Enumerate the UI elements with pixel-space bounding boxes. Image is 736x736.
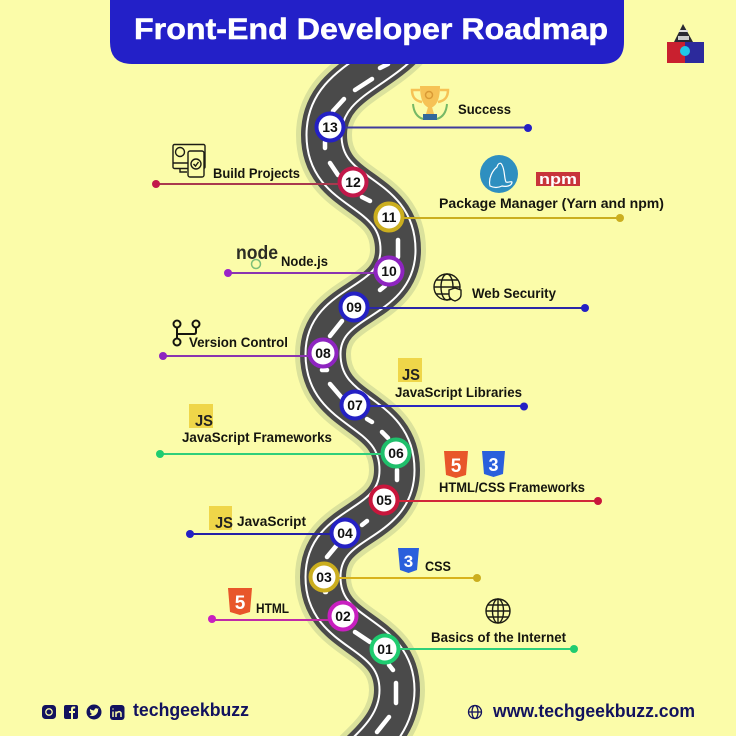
marker 12 bbox=[340, 168, 366, 196]
icon: html5: 5 bbox=[451, 456, 462, 477]
marker 03: 03 bbox=[316, 569, 332, 585]
step 10: node.js: Node.js bbox=[281, 254, 328, 269]
social icons bbox=[42, 704, 124, 720]
marker 09 bbox=[340, 294, 368, 320]
icon: trophy bbox=[412, 86, 448, 120]
icon: git branch bbox=[174, 320, 200, 346]
step 01: basics of the internet bbox=[398, 599, 578, 653]
marker 12: 12 bbox=[345, 174, 361, 190]
numbered road markers bbox=[310, 114, 410, 662]
marker 13: 13 bbox=[322, 119, 338, 135]
icon: devices bbox=[173, 144, 205, 177]
step 06: javascript frameworks: JavaScript Frameworks bbox=[182, 430, 332, 445]
icon: footer globe bbox=[468, 706, 482, 718]
marker 04 bbox=[332, 520, 358, 546]
step 02: html: HTML bbox=[256, 601, 289, 616]
icon: js bbox=[398, 358, 422, 384]
icon: css3: 3 bbox=[404, 552, 413, 571]
step 12: build projects bbox=[152, 144, 340, 188]
step 05: html/css frameworks bbox=[398, 451, 602, 505]
icon: html5: 5 bbox=[235, 593, 246, 614]
step 07: javascript libraries bbox=[370, 358, 528, 410]
step 04: javascript bbox=[186, 506, 332, 538]
step 03: css bbox=[338, 548, 481, 582]
winding road bbox=[322, 42, 405, 736]
step 10: node.js bbox=[224, 243, 375, 277]
icon: js bbox=[189, 404, 213, 430]
icon: globe with shield bbox=[434, 274, 461, 301]
step 13: success bbox=[345, 86, 532, 132]
icon: css3 bbox=[482, 451, 505, 477]
marker 08 bbox=[310, 340, 336, 366]
marker 06: 06 bbox=[388, 445, 404, 461]
step 11: package manager bbox=[404, 155, 664, 222]
icon: hacker laptop logo bbox=[667, 24, 704, 63]
icon: js bbox=[209, 506, 233, 532]
marker 09: 09 bbox=[346, 299, 362, 315]
step 02: html bbox=[208, 588, 330, 623]
marker 05 bbox=[370, 486, 398, 514]
marker 08: 08 bbox=[315, 345, 331, 361]
step 11: package manager: Package Manager (Yarn and npm) bbox=[439, 196, 664, 211]
footer brand name: techgeekbuzz bbox=[133, 699, 249, 720]
marker 05: 05 bbox=[376, 492, 392, 508]
marker 11: 11 bbox=[382, 209, 397, 225]
step 09: web security bbox=[368, 274, 589, 312]
icon: twitter bbox=[86, 704, 102, 720]
step 01: basics of the internet: Basics of the Internet bbox=[431, 630, 566, 645]
icon: node logo: node bbox=[236, 243, 278, 264]
marker 10: 10 bbox=[381, 263, 397, 279]
step 09: web security: Web Security bbox=[472, 286, 556, 301]
title banner: Front-End Developer Roadmap bbox=[134, 13, 608, 46]
marker 03 bbox=[310, 564, 338, 590]
icon: globe bbox=[486, 599, 510, 623]
marker 13 bbox=[316, 114, 344, 140]
step 08: version control bbox=[159, 320, 310, 360]
marker 07 bbox=[342, 392, 368, 418]
icon: linkedin bbox=[110, 705, 124, 720]
step 05: html/css frameworks: HTML/CSS Frameworks bbox=[439, 480, 585, 495]
marker 02 bbox=[330, 602, 356, 630]
icon: css3 bbox=[398, 548, 419, 573]
marker 07: 07 bbox=[347, 397, 363, 413]
icon: html5 bbox=[444, 451, 468, 478]
icon: js: JS bbox=[195, 413, 213, 430]
marker 10 bbox=[376, 258, 402, 284]
icon: instagram bbox=[42, 705, 56, 719]
step 03: css: CSS bbox=[425, 559, 451, 574]
marker 02: 02 bbox=[335, 608, 351, 624]
step 12: build projects: Build Projects bbox=[213, 166, 300, 181]
icon: npm: npm bbox=[539, 171, 577, 188]
step 08: version control: Version Control bbox=[189, 335, 288, 350]
icon: css3: 3 bbox=[488, 455, 499, 475]
step 07: javascript libraries: JavaScript Libraries bbox=[395, 385, 522, 400]
marker 01: 01 bbox=[377, 641, 393, 657]
marker 06 bbox=[382, 440, 410, 466]
marker 11 bbox=[376, 204, 402, 230]
icon: yarn bbox=[480, 155, 518, 193]
icon: js: JS bbox=[402, 367, 420, 384]
step 06: javascript frameworks bbox=[156, 404, 382, 458]
icon: facebook bbox=[64, 705, 78, 719]
title banner bbox=[110, 0, 624, 64]
step 13: success: Success bbox=[458, 102, 511, 117]
marker 04: 04 bbox=[337, 525, 353, 541]
footer website: www.techgeekbuzz.com bbox=[492, 700, 695, 721]
marker 01 bbox=[372, 636, 398, 662]
icon: js: JS bbox=[215, 515, 233, 532]
step 04: javascript: JavaScript bbox=[237, 514, 307, 529]
